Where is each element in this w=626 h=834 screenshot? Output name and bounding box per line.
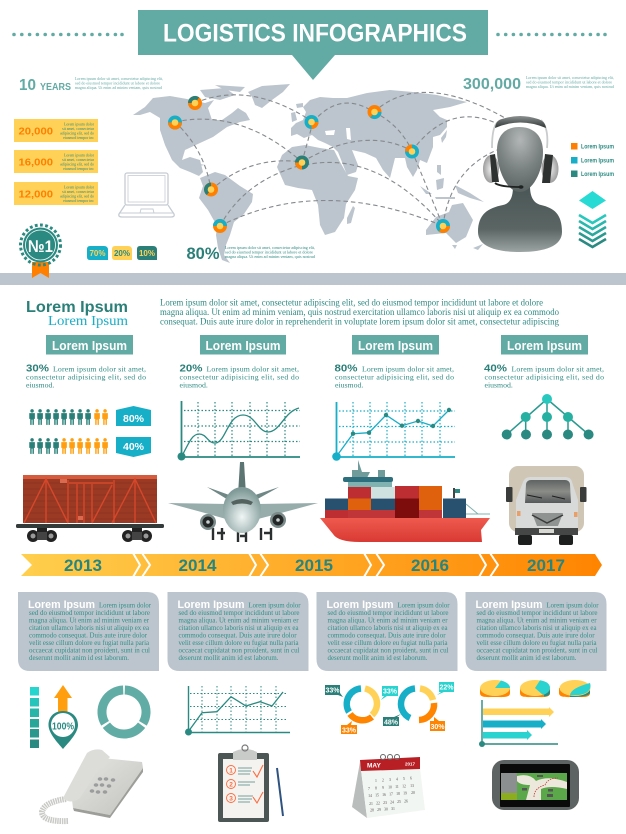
calendar: 31 [391,807,395,811]
card 2016: deserunt mollit anim id est laborum. [476,653,577,662]
calendar: 26 [404,800,408,804]
card 2015: commodo consequat. Duis aute irure dolor [328,630,446,640]
icon: layer stack [579,191,606,247]
card 2016: Lorem Ipsum [476,599,543,611]
column text 30%: consectetur adipisicing elit, sed do [26,372,146,382]
line chart: points [332,402,455,461]
legend: Lorem Ipsum [581,172,614,178]
world map [133,84,484,263]
calendar: 28 [370,808,374,812]
icon: arrow and 100% pin: 100% [52,722,74,732]
calendar: 5 [403,777,405,781]
section heading: Lorem Ipsum [26,299,128,316]
intro paragraph [160,298,559,326]
airplane [168,462,318,542]
column text 30%: Lorem ipsum dolor sit amet, [53,364,146,374]
people chart 80% [29,406,151,426]
card 2016: citation ullamco laboris nisi ut aliquip ex ea [476,623,597,632]
calendar: 13 [410,784,414,788]
clipboard [218,745,269,822]
card 2013: Lorem ipsum dolor [99,600,152,610]
ribbon tail over band [32,272,49,278]
yellow stat boxes: 16,000 [18,156,53,168]
calendar: 12 [402,784,406,788]
card 2014: velit esse cillum dolore eu fugiat nulla paria [178,638,299,647]
people chart 40% [29,437,151,457]
map location markers [170,98,448,231]
percentage tags: 20% [114,249,130,258]
calendar: 4 [396,778,398,782]
calendar [352,754,425,818]
icon: laptop [119,173,174,217]
yellow stat boxes: sit amet, consectetur [62,158,95,163]
timeline arrow: 2014 [178,557,217,575]
yellow stat boxes: 12,000 [18,188,53,200]
timeline arrow: 2015 [295,557,333,575]
tree diagram [502,394,594,440]
timeline arrow: 2017 [527,557,565,575]
ring diagram [102,690,146,734]
title banner [138,10,488,80]
card 2016 [466,592,606,671]
card 2015: sed do eiusmod tempor incididunt ut labore [328,608,448,617]
column text 20%: Lorem ipsum dolor sit amet, [206,364,299,374]
card 2014: deserunt mollit anim id est laborum. [178,653,279,662]
stat: 80%: sed do eiusmod tempor incididunt ut labore et dolore [225,250,313,254]
card 2015: citation ullamco laboris nisi ut aliquip ex ea [328,623,448,632]
stat: 10 years: 10 [19,77,36,94]
line chart: curve [178,401,300,460]
column text 80%: consectetur adipisicing elit, sed do [335,372,454,382]
column text 40%: 40% [484,364,507,374]
yellow stat boxes: eiusmod tempor inc [63,136,94,140]
card 2013: sed do eiusmod tempor incididunt ut labore [29,608,150,617]
calendar: 30 [384,808,388,812]
donut charts with callouts [347,688,434,720]
No.1 badge: №1 [28,237,53,256]
telephone [42,749,143,821]
calendar: 14 [368,794,372,798]
card 2014: magna aliqua. Ut enim ad minim veniam er [178,616,299,624]
card 2015: Lorem ipsum dolor [398,600,450,610]
dotted rule left [12,33,124,36]
No.1 badge [20,225,60,278]
column text 40%: Lorem ipsum dolor sit amet, [512,364,604,374]
card 2015: magna aliqua. Ut enim ad minim veniam er [328,616,448,624]
column headers: Lorem Ipsum [358,339,433,353]
yellow stat boxes: sit amet, consectetur [62,190,95,195]
yellow stat boxes: Lorem ipsum dolor [64,186,95,190]
card 2015: deserunt mollit anim id est laborum. [328,653,428,662]
truck [506,466,586,545]
yellow stat boxes: adipiscing elit, sed do [60,194,94,200]
column headers [46,335,588,354]
card 2014: sed do eiusmod tempor incididunt ut labore [178,608,300,617]
calendar: 15 [375,794,379,798]
card 2013: magna aliqua. Ut enim ad minim veniam er [29,616,150,624]
stat: 10 years: YEARS [40,82,71,93]
donut percentage labels: 48% [384,720,399,726]
stat: 80%: 80% [186,245,220,263]
percentage tags [87,246,157,260]
yellow stat boxes: Lorem ipsum dolor [64,154,95,158]
divider band [0,273,626,285]
column text 30%: 30% [26,364,49,374]
card 2013: commodo consequat. Duis aute irure dolor [29,630,148,640]
card 2016: occaecat cupidatat non proident, sunt in cul [476,646,598,654]
stat: 300,000: 300,000 [463,76,521,93]
calendar: 3 [389,778,391,782]
yellow stat boxes: adipiscing elit, sed do [60,132,94,136]
percentage tags: 70% [89,249,106,258]
yellow stat boxes: eiusmod tempor inc [63,167,94,171]
route lines [175,92,505,226]
card 2013 [18,592,159,671]
stat: 80%: Lorem ipsum dolor sit amet, consectetur adipiscing elit, [225,245,315,251]
yellow stat boxes: eiusmod tempor inc [63,199,94,203]
card 2014: Lorem Ipsum [178,599,245,611]
stat: 10 years: Lorem ipsum dolor sit amet, consectetur adipiscing elit, [75,76,163,82]
line chart: small [185,686,290,736]
card 2015: velit esse cillum dolore eu fugiat nulla paria [328,638,448,647]
calendar: 9 [382,786,384,790]
column text 80% [334,364,454,390]
title banner: LOGISTICS INFOGRAPHICS [163,20,467,48]
card 2016: commodo consequat. Duis aute irure dolor [476,630,595,640]
column text 40%: consectetur adipisicing elit, sed do [484,372,604,382]
calendar: 17 [389,792,393,796]
donut percentage labels: 33% [342,728,357,734]
yellow stat boxes [14,119,98,205]
column text 20%: 20% [180,364,203,374]
calendar: 2 [382,778,384,782]
stat: 10 years [19,76,163,94]
column text 80%: eiusmod. [335,380,363,390]
colour squares column [30,687,39,748]
column text 30%: eiusmod. [26,380,54,390]
card 2013: deserunt mollit anim id est laborum. [29,653,129,662]
intro paragraph: consequat. Duis aute irure dolor in reprehenderit in voluptate lorem ipsum dolor sit amet, consectetur adipiscing [160,316,559,326]
card 2016: sed do eiusmod tempor incididunt ut labore [476,608,598,617]
cargo ship [320,460,490,542]
card 2014: Lorem ipsum dolor [248,600,301,610]
stat: 300,000: Lorem ipsum dolor sit amet, consectetur adipiscing elit, [526,75,614,81]
calendar: 29 [377,808,381,812]
calendar: 8 [375,786,377,790]
legend: Lorem Ipsum [581,144,614,150]
pencil [277,768,283,816]
stat: 300,000 [463,75,615,93]
column text 80%: Lorem ipsum dolor sit amet, [362,364,454,374]
column text 40%: eiusmod. [484,380,513,390]
card 2015: occaecat cupidatat non proident, sunt in cul [328,646,448,654]
card 2013: occaecat cupidatat non proident, sunt in cul [29,646,150,654]
calendar: 2017 [405,762,416,766]
timeline arrow [21,553,602,577]
calendar: 16 [382,793,386,797]
timeline arrow: 2016 [411,557,449,575]
yellow stat boxes: adipiscing elit, sed do [60,162,94,168]
donut percentage labels: 33% [325,688,340,694]
column text 20%: consectetur adipisicing elit, sed do [180,372,299,382]
legend: Lorem Ipsum [581,158,614,164]
stat: 80%: magna aliqua. Ut enim ad minim veniam, quis nostrud [225,254,316,260]
section heading: Lorem Ipsum [48,314,128,329]
stat: 10 years: magna aliqua. Ut enim ad minim veniam, quis nostrud [75,85,163,91]
calendar: 24 [390,800,394,804]
card 2016: velit esse cillum dolore eu fugiat nulla paria [476,638,597,647]
calendar: 10 [388,786,392,790]
dotted rule right [496,33,607,36]
yellow stat boxes: sit amet, consectetur [62,127,95,132]
column text 80%: 80% [334,364,358,374]
section heading [26,299,128,329]
donut percentage labels: 22% [439,684,454,692]
column text 20% [180,364,299,390]
card 2014: occaecat cupidatat non proident, sunt in cul [178,646,300,654]
stat: 10 years: sed do eiusmod tempor incididunt ut labore et dolore [75,80,160,86]
donut percentage labels [325,682,454,734]
calendar: MAY [367,762,382,770]
card 2013: citation ullamco laboris nisi ut aliquip ex ea [29,623,150,632]
GPS navigator [492,760,579,810]
calendar: 25 [397,800,401,804]
clipboard: 2 [229,782,233,788]
intro paragraph: magna aliqua. Ut enim ad minim veniam, quis nostrud exercitation ullamco laboris nisi ut aliquip ex ea commodo [160,307,559,317]
clipboard: 1 [229,768,233,774]
card 2016: magna aliqua. Ut enim ad minim veniam er [476,616,597,624]
calendar: 18 [396,792,400,796]
donut percentage labels: 30% [430,724,445,731]
calendar: 6 [410,776,412,780]
calendar: 7 [368,787,370,791]
stat: 300,000: magna aliqua. Ut enim ad minim veniam, quis nostrud [526,84,615,90]
icon: arrow and 100% pin [48,685,78,749]
column headers: Lorem Ipsum [507,339,582,353]
people chart 40%: 40% [123,441,145,453]
calendar: 22 [376,802,380,806]
card 2015: Lorem Ipsum [326,599,394,611]
calendar: 11 [395,785,399,789]
donut percentage labels: 33% [383,688,398,696]
percentage tags: 10% [139,249,155,258]
operator with headset [478,116,562,252]
card 2016: Lorem ipsum dolor [546,600,599,610]
people chart 80%: 80% [123,413,145,425]
calendar: 23 [383,801,387,805]
card 2014: citation ullamco laboris nisi ut aliquip ex ea [178,623,299,632]
intro paragraph: Lorem ipsum dolor sit amet, consectetur adipiscing elit, sed do eiusmod tempor incididunt ut labore et dolore [160,298,543,308]
card 2013: velit esse cillum dolore eu fugiat nulla paria [29,638,150,647]
stat: 300,000: sed do eiusmod tempor incididunt ut labore et dolore [526,80,612,84]
clipboard: 3 [229,796,233,802]
column text 40% [484,364,604,390]
calendar: 21 [369,802,373,806]
calendar: 19 [403,792,407,796]
card 2013: Lorem Ipsum [28,599,95,611]
column headers: Lorem Ipsum [206,339,280,353]
calendar: 20 [411,791,415,795]
card 2015 [316,592,458,671]
horizontal bar chart [479,700,558,747]
calendar: 1 [375,779,377,783]
card 2014: commodo consequat. Duis aute irure dolor [178,630,297,640]
yellow stat boxes: Lorem ipsum dolor [64,122,95,126]
column headers: Lorem Ipsum [52,339,127,353]
card 2014 [168,592,308,671]
column text 20%: eiusmod. [180,380,208,390]
legend [571,143,614,178]
yellow stat boxes: 20,000 [18,126,53,138]
pie icons [480,680,590,697]
stat: 80% [186,245,316,263]
train wagon [16,475,164,542]
column text 30% [26,364,146,390]
timeline arrow: 2013 [64,557,102,575]
